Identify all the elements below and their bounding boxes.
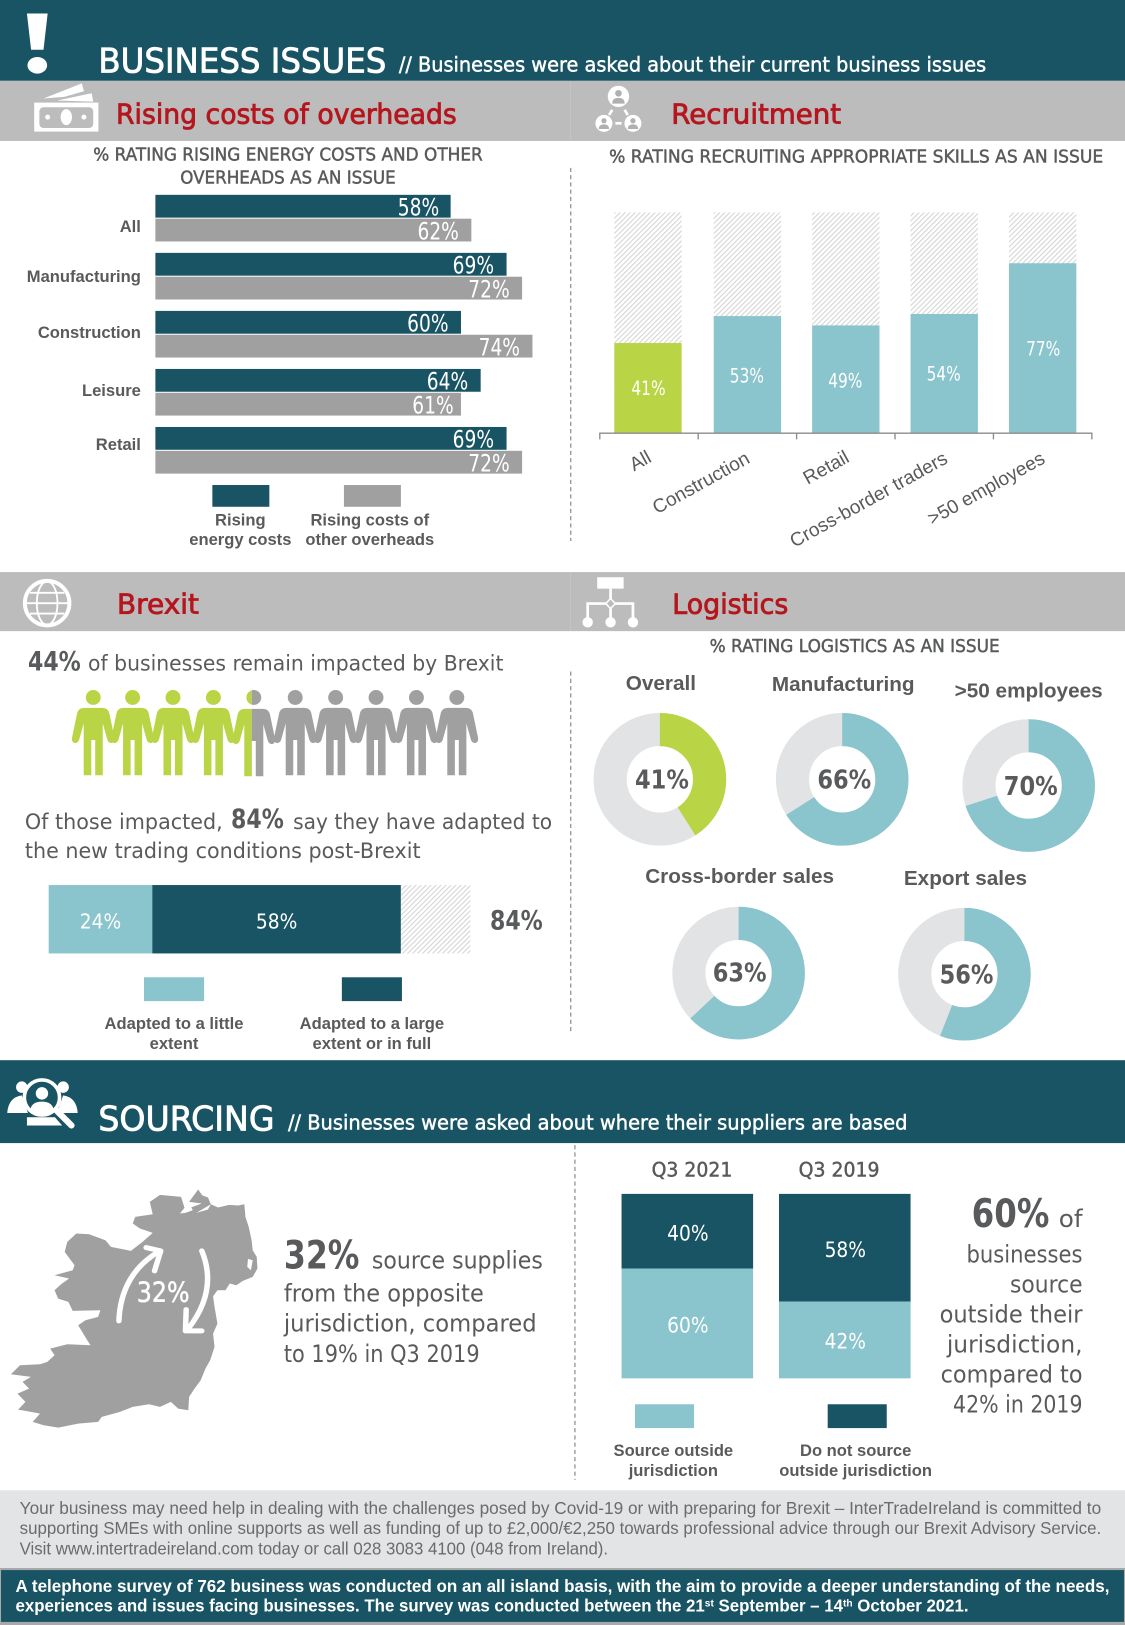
subtitle: sourcing: // Businesses were asked about where their suppliers are based — [288, 1111, 907, 1135]
donut: cross-border sales 63%: 63% — [713, 958, 767, 988]
footer: survey note — [0, 1568, 1125, 1625]
text: 60% source outside: outside their — [940, 1300, 1083, 1328]
bar chart: overheads by sector: 69% — [453, 426, 494, 454]
bar chart: overheads by sector: 62% — [417, 217, 459, 245]
heading: logistics: Logistics — [672, 588, 788, 621]
footer: survey note: A telephone survey of 762 business was conducted on an all island basis, with the aim to provide a deeper understanding of the needs, — [16, 1577, 1109, 1596]
text: 84% adapted: say they have adapted to — [293, 810, 552, 835]
panel: recruitment — [571, 81, 1125, 552]
donut: overall 41% — [610, 672, 710, 829]
bar chart: overheads by sector — [27, 194, 532, 478]
text: 44% impacted — [28, 647, 503, 678]
title: business issues: BUSINESS ISSUES — [98, 42, 386, 82]
stacked bar: adaptation: 58% — [256, 910, 297, 934]
heading: brexit: Brexit — [117, 588, 199, 621]
text: 32% source supplies: source supplies — [372, 1246, 543, 1274]
text: 60% source outside: jurisdiction, — [946, 1330, 1083, 1358]
stacked bar: adaptation: 24% — [80, 910, 121, 934]
bar chart: overheads by sector: 61% — [412, 391, 454, 420]
legend: sourcing: Source outside — [614, 1441, 733, 1460]
stacked columns: source outside jurisdiction: 60% — [667, 1314, 709, 1339]
chart title: recruitment: % RATING RECRUITING APPROPRIATE SKILLS AS AN ISSUE — [609, 147, 1103, 168]
icon: connected people — [595, 86, 641, 132]
legend: adaptation: Adapted to a large — [300, 1014, 444, 1033]
chart title: overheads: % RATING RISING ENERGY COSTS AND OTHER — [93, 145, 483, 166]
footer: support message — [0, 1490, 1125, 1568]
donut: overall 41%: Overall — [626, 672, 696, 695]
text: 44% impacted: 44% — [28, 647, 81, 678]
stacked columns: source outside jurisdiction: Q3 2021 — [652, 1158, 732, 1181]
chart title: logistics: % RATING LOGISTICS AS AN ISSUE — [710, 637, 1000, 657]
heading: rising costs: Rising costs of overheads — [116, 97, 457, 130]
text: 32% source supplies: to 19% in Q3 2019 — [284, 1340, 480, 1368]
text: 84% adapted: 84% — [231, 804, 284, 835]
column chart: recruiting skills: Construction — [649, 448, 753, 519]
column chart: recruiting skills: 54% — [927, 362, 961, 385]
panel: logistics — [571, 572, 1125, 1024]
text: 60% source outside: source — [1010, 1270, 1083, 1298]
footer: survey note: September – 14 — [714, 1597, 843, 1616]
title: sourcing: SOURCING — [98, 1100, 275, 1140]
donut: overall 41%: 41% — [635, 766, 689, 796]
legend: overheads: other overheads — [305, 530, 434, 549]
bar chart: overheads by sector: All — [120, 217, 141, 236]
icon: banknotes — [34, 83, 98, 132]
legend: adaptation: Adapted to a little — [105, 1014, 243, 1033]
panel: rising costs of overheads — [0, 81, 571, 549]
donut: manufacturing 66% — [772, 673, 915, 829]
pictogram: ten people, 44% highlighted — [72, 690, 478, 776]
subtitle: business issues: // Businesses were asked about their current business issues — [399, 53, 986, 77]
column chart: recruiting skills: All — [626, 447, 655, 476]
donut: export sales 56%: Export sales — [904, 867, 1027, 890]
donut: export sales 56% — [904, 867, 1027, 1024]
stacked bar: adaptation: 84% — [490, 906, 543, 937]
heading: recruitment: Recruitment — [671, 97, 841, 130]
map: island of Ireland with 32% arrows: 32% — [137, 1276, 190, 1309]
legend: sourcing: Do not source — [800, 1441, 911, 1460]
legend: sourcing — [614, 1404, 932, 1480]
bar chart: overheads by sector: Retail — [96, 435, 141, 454]
text: 84% adapted: the new trading conditions post-Brexit — [25, 839, 421, 864]
legend: adaptation: extent — [150, 1034, 199, 1053]
footer: support message: supporting SMEs with online supports as well as funding of up to £2,000/€2,250 towards professional advice through our Brexit Advisory Service. — [20, 1519, 1101, 1538]
column chart: recruiting skills — [600, 212, 1092, 552]
footer: survey note: th — [843, 1598, 853, 1609]
text: 60% source outside: of — [1059, 1205, 1083, 1233]
bar chart: overheads by sector: 64% — [427, 368, 468, 396]
bar chart: overheads by sector: Construction — [38, 323, 141, 342]
footer: survey note: st — [705, 1598, 714, 1609]
text: 44% impacted: of businesses remain impacted by Brexit — [88, 652, 503, 677]
icon: people under magnifier — [7, 1079, 78, 1125]
header: sourcing — [0, 1060, 1125, 1143]
text: 60% source outside: businesses — [967, 1240, 1083, 1268]
bar chart: overheads by sector: 58% — [398, 194, 439, 222]
donut: cross-border sales 63%: Cross-border sales — [645, 865, 834, 888]
column chart: recruiting skills: >50 employees — [924, 448, 1049, 530]
bar chart: overheads by sector: 72% — [468, 275, 510, 303]
donut: manufacturing 66%: 66% — [817, 766, 871, 796]
legend: overheads: Rising costs of — [310, 510, 430, 529]
donut: over 50 employees 70% — [955, 679, 1103, 835]
bar chart: overheads by sector: 69% — [453, 252, 494, 280]
map: island of Ireland with 32% arrows — [11, 1190, 257, 1428]
text: 60% source outside: 42% in 2019 — [953, 1391, 1083, 1419]
legend: adaptation: extent or in full — [313, 1034, 431, 1053]
donut: over 50 employees 70%: >50 employees — [955, 679, 1103, 702]
text: 32% source supplies: from the opposite — [284, 1280, 484, 1308]
icon: globe — [25, 581, 69, 625]
donut: over 50 employees 70%: 70% — [1004, 772, 1058, 802]
header: business issues — [0, 0, 1125, 82]
legend: sourcing: outside jurisdiction — [779, 1461, 932, 1480]
text: 60% source outside — [940, 1191, 1083, 1419]
stacked columns: source outside jurisdiction: 58% — [825, 1238, 866, 1263]
stacked columns: source outside jurisdiction — [622, 1158, 911, 1378]
legend: adaptation — [105, 977, 444, 1053]
donut: export sales 56%: 56% — [940, 960, 993, 990]
stacked columns: source outside jurisdiction: 40% — [667, 1222, 709, 1247]
column chart: recruiting skills: Retail — [800, 447, 853, 489]
chart title: overheads — [93, 145, 483, 188]
bar chart: overheads by sector: Manufacturing — [27, 267, 141, 286]
text: 60% source outside: 60% — [972, 1191, 1049, 1237]
footer: support message: Your business may need help in dealing with the challenges posed by Covid-19 or with preparing for Brexit – InterTradeIreland is committed to — [20, 1499, 1101, 1518]
bar chart: overheads by sector: 60% — [407, 310, 449, 338]
stacked columns: source outside jurisdiction: Q3 2019 — [799, 1158, 879, 1181]
text: 84% adapted: Of those impacted, — [25, 810, 223, 835]
donut: cross-border sales 63% — [645, 865, 834, 1023]
column chart: recruiting skills: 49% — [828, 370, 862, 393]
icon: hierarchy — [582, 577, 638, 628]
text: 32% source supplies: 32% — [284, 1232, 359, 1278]
text: 60% source outside: compared to — [941, 1360, 1083, 1388]
text: 84% adapted — [25, 804, 552, 864]
footer: survey note: experiences and issues facing businesses. The survey was conducted between the 21 — [16, 1597, 715, 1616]
icon: exclamation mark — [27, 13, 48, 74]
text: 32% source supplies — [283, 1232, 543, 1368]
legend: overheads: Rising — [215, 510, 266, 529]
text: 32% source supplies: jurisdiction, compared — [283, 1310, 537, 1338]
column chart: recruiting skills: Cross-border traders — [787, 448, 951, 552]
footer: survey note: October 2021. — [853, 1597, 969, 1616]
panel: brexit — [0, 572, 571, 1053]
bar chart: overheads by sector: Leisure — [82, 381, 141, 400]
column chart: recruiting skills: 53% — [730, 364, 764, 387]
legend: sourcing: jurisdiction — [628, 1461, 718, 1480]
column chart: recruiting skills: 41% — [631, 377, 666, 400]
legend: overheads — [189, 485, 434, 549]
bar chart: overheads by sector: 74% — [479, 333, 520, 361]
stacked bar: adaptation — [49, 885, 543, 953]
legend: overheads: energy costs — [189, 530, 291, 549]
chart title: overheads: OVERHEADS AS AN ISSUE — [180, 167, 396, 188]
column chart: recruiting skills: 77% — [1026, 337, 1060, 360]
stacked columns: source outside jurisdiction: 42% — [825, 1329, 866, 1354]
footer: support message: Visit www.intertradeireland.com today or call 028 3083 4100 (048 from Ireland). — [20, 1540, 608, 1559]
donut: manufacturing 66%: Manufacturing — [772, 673, 915, 696]
bar chart: overheads by sector: 72% — [468, 450, 510, 478]
